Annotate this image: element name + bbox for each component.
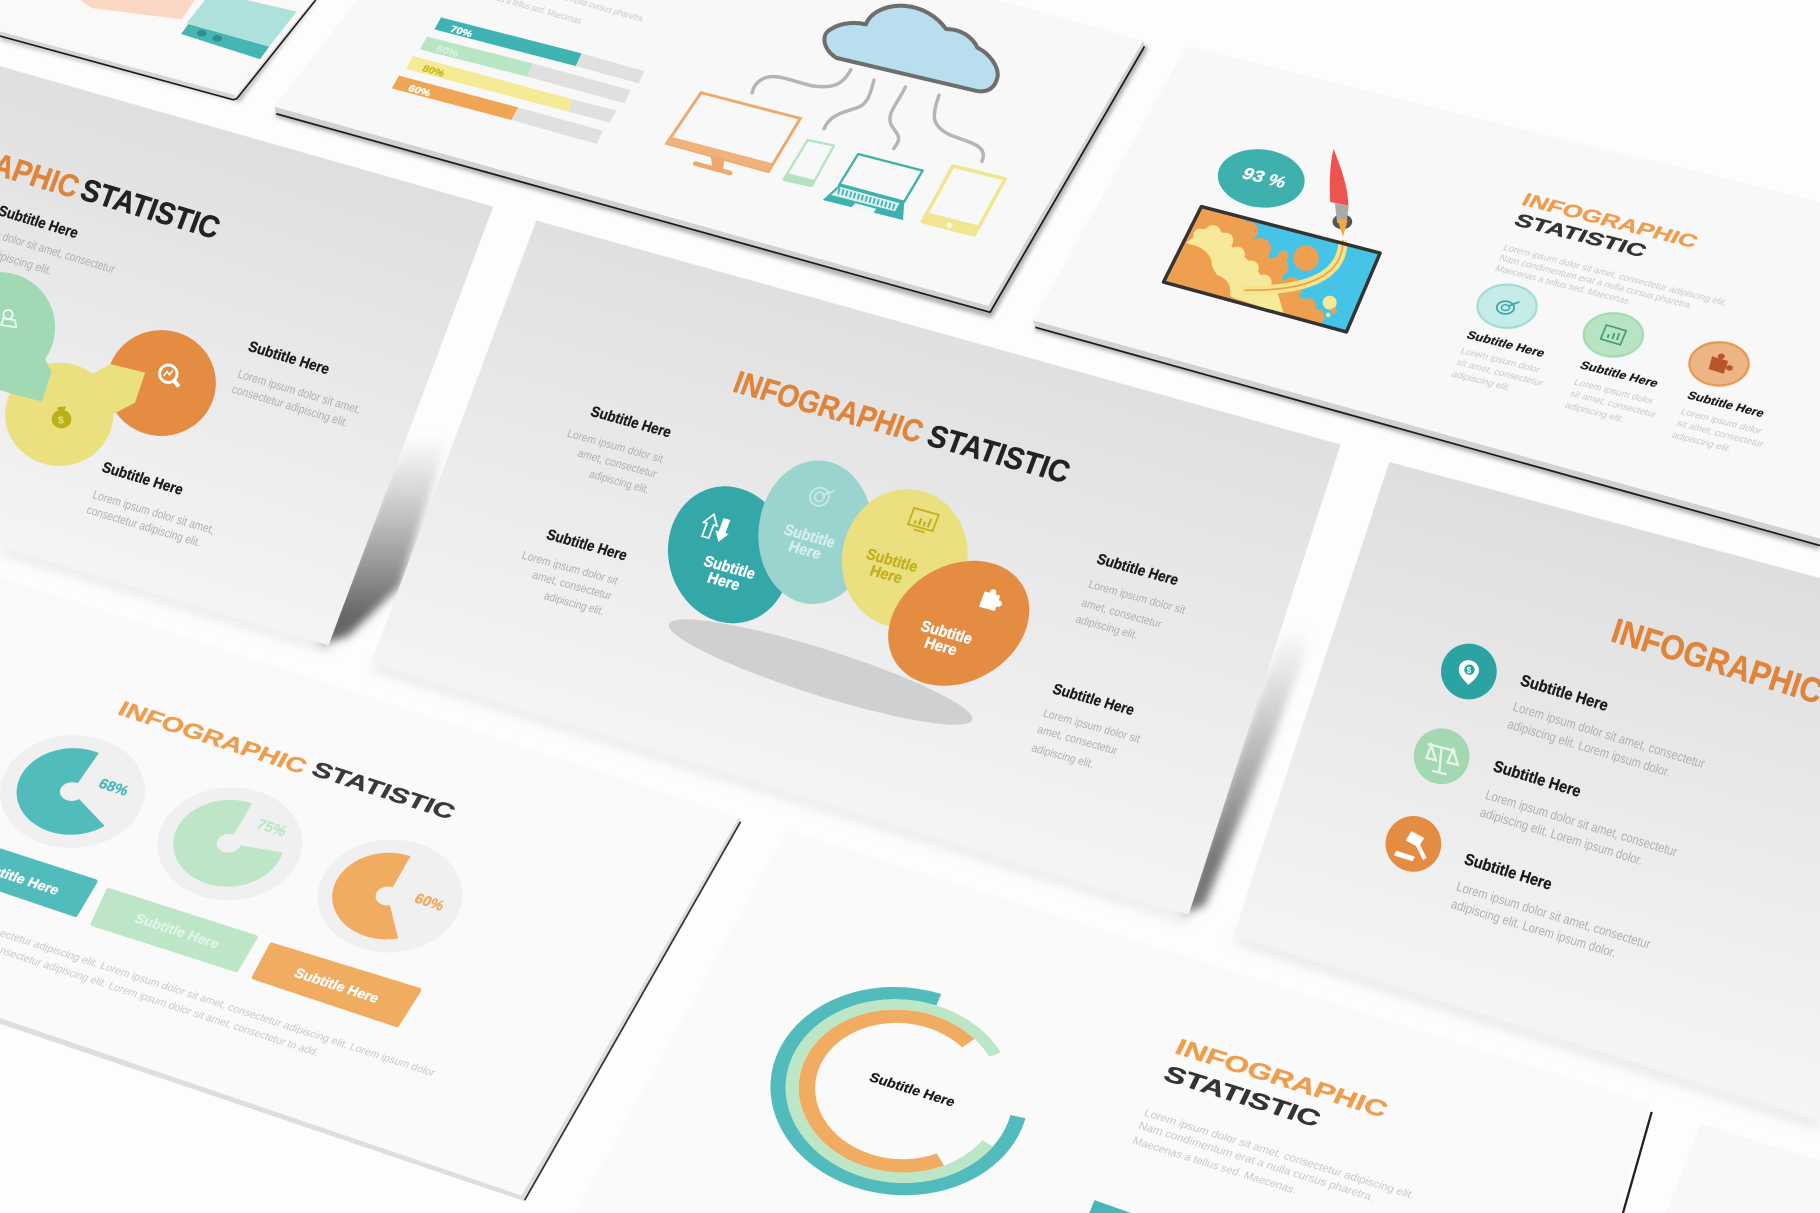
text block: right item: Lorem ipsum dolor sit amet,: [236, 367, 363, 416]
diagram: orange circle: [107, 330, 216, 436]
text block: lower right: [1030, 681, 1143, 771]
egg: orange: Here: [922, 635, 959, 659]
panel: rocket slide: [1032, 148, 1820, 552]
shadow: left slide wedge: [319, 250, 482, 645]
text block: lower right: adipiscing elit.: [1030, 742, 1096, 771]
item: gavel: Lorem ipsum dolor sit amet, consectetur: [1455, 879, 1653, 952]
text block: upper right: Subtitle Here: [1094, 551, 1181, 589]
icon: cloud: [824, 6, 998, 91]
shape: cropped teal button: [1089, 1200, 1134, 1213]
egg: teal: [653, 472, 805, 637]
shape: peach block: [80, 0, 195, 19]
icon: tablet: [922, 166, 1005, 235]
pie chart: 60 percent: [295, 822, 485, 970]
item: scales: [1414, 728, 1680, 868]
egg: light teal: Here: [786, 538, 824, 563]
item: chart: Subtitle Here: [1578, 359, 1661, 390]
text block: right item: [230, 338, 363, 430]
icon: laptop: [823, 154, 923, 220]
panel: centre egg diagram slide: [371, 221, 1341, 919]
icon: rocket: [1330, 149, 1352, 237]
egg: orange: [865, 536, 1052, 711]
icon: money bag: [52, 406, 71, 428]
pie chart: 60 percent: 60%: [411, 891, 447, 914]
pie chart: 68 percent: 68%: [96, 776, 131, 799]
diagram: green circle with connector: [0, 272, 55, 402]
floor shadow: [662, 602, 979, 742]
item: puzzle: [1670, 342, 1767, 454]
text block: upper right: [1074, 551, 1188, 642]
title: INFOGRAPHIC: [1518, 189, 1702, 252]
text block: upper left: amet, consectetur: [576, 447, 659, 481]
pie chart: 75 percent: [134, 770, 325, 918]
item: scales: Subtitle Here: [1491, 757, 1583, 801]
egg: yellow: Subtitle: [864, 546, 920, 576]
item: chart: sit amet, consectetur: [1568, 389, 1659, 420]
egg: teal: Here: [705, 570, 742, 594]
title second word: STATISTIC: [307, 757, 460, 825]
text block: description: Nam condimentum erat a nulla cursus pharetra.: [1497, 253, 1695, 311]
pie chart: 68 percent: [0, 718, 168, 865]
text block: description: Lorem ipsum dolor sit amet, consectetur adipiscing elit.: [1501, 243, 1729, 308]
icon: people: [1, 310, 16, 327]
panel: connected circles slide: [0, 66, 493, 649]
item: target: [1449, 285, 1548, 393]
text block: lower left: Subtitle Here: [544, 526, 630, 564]
text block: upper left: Lorem ipsum dolor sit: [565, 427, 666, 466]
item: target: Subtitle Here: [1464, 329, 1548, 359]
item: location pin: Subtitle Here: [1518, 672, 1610, 715]
chart: concentric rings: [743, 963, 1056, 1213]
text block: description: Lorem ipsum dolor sit amet, consectetur adipiscing elit.: [1142, 1106, 1417, 1201]
item: gavel: [1386, 816, 1653, 960]
button: green: [93, 890, 255, 970]
item: chart: Lorem ipsum dolor: [1572, 377, 1656, 406]
item: target: adipiscing elit.: [1449, 369, 1513, 393]
title: INFOGRAPHIC: [1171, 1035, 1392, 1123]
title: INFOGRAPHIC: [729, 364, 928, 449]
text block: upper right: amet, consectetur: [1080, 597, 1164, 631]
item: target: Lorem ipsum dolor: [1458, 346, 1543, 375]
text block: lower right: Lorem ipsum dolor sit: [1041, 707, 1143, 746]
connector wires: [752, 70, 983, 161]
illustration: tablet with rocket launch: [1156, 207, 1380, 332]
bar chart: percentage bars: 60%: [434, 44, 460, 59]
shadow: centre slide wedge: [1182, 499, 1329, 915]
title second word: STATISTIC: [923, 418, 1075, 490]
text block: lower item: consectetur adipiscing elit.: [85, 503, 203, 550]
panel: cloud devices slide: [275, 0, 1146, 315]
item: chart: [1563, 313, 1661, 424]
panel: pie charts slide: [0, 577, 741, 1201]
item: scales: adipiscing elit. Lorem ipsum dolor.: [1478, 805, 1645, 868]
egg: orange: Subtitle: [918, 618, 975, 648]
title: INFOGRAPHIC: [114, 697, 311, 779]
item: gavel: adipiscing elit. Lorem ipsum dolor.: [1449, 896, 1618, 960]
text block: description: Maecenas a tellus sed. Maecenas.: [1493, 264, 1633, 307]
shape: device base with dots: [181, 24, 269, 59]
item: puzzle: Subtitle Here: [1685, 389, 1767, 420]
panel: top-left partial slide: [0, 0, 316, 102]
title second word: STATISTIC: [76, 172, 225, 246]
bar chart: percentage bars: 60%: [406, 84, 432, 99]
text block: top-left item: [0, 203, 117, 278]
item: location pin: adipiscing elit. Lorem ipsum dolor.: [1506, 716, 1673, 780]
text block: upper left: adipiscing elit.: [587, 468, 651, 496]
item: target: sit amet, consectetur: [1454, 358, 1545, 388]
egg: yellow: [828, 476, 982, 640]
button: orange: Subtitle Here: [291, 966, 382, 1006]
text block: description: Nam condimentum erat a nulla cursus pharetra.: [1136, 1119, 1377, 1203]
text block: right item: consectetur adipiscing elit.: [230, 382, 350, 430]
item: puzzle: Lorem ipsum dolor: [1679, 407, 1764, 436]
icon: desktop monitor: [667, 93, 800, 173]
text block: lower item: Subtitle Here: [100, 459, 186, 499]
text block: lower right: Subtitle Here: [1050, 681, 1137, 719]
icon: smartphone: [783, 140, 834, 186]
item: location pin: [1441, 644, 1707, 780]
button: orange: [254, 945, 419, 1025]
text block: lower left: Lorem ipsum dolor sit: [520, 549, 620, 588]
panel: right list slide: [1234, 462, 1820, 1125]
text block: upper left: Subtitle Here: [588, 403, 674, 441]
text block: description: [1493, 243, 1729, 311]
panel: bottom-right partial slide: [1666, 1124, 1820, 1213]
text block: lower left: amet, consectetur: [531, 569, 614, 603]
text block: lower item: [85, 459, 217, 550]
bar chart: percentage bars: 80%: [420, 64, 446, 79]
item: location pin: Lorem ipsum dolor sit amet, consectetur: [1511, 699, 1707, 771]
bar chart: percentage bars: 70%: [448, 24, 474, 40]
text block: lower left: adipiscing elit.: [542, 590, 606, 618]
egg: light teal: [751, 455, 879, 610]
text block: lower left: [520, 526, 630, 618]
title line two: STATISTIC: [1511, 209, 1651, 261]
item: scales: Lorem ipsum dolor sit amet, consectetur: [1484, 787, 1680, 859]
button: green: Subtitle Here: [132, 911, 222, 952]
shape: device screen: [187, 0, 297, 46]
text block: description: Maecenas a tellus sed. Maecenas.: [1131, 1134, 1299, 1196]
bar chart: percentage bars: [392, 17, 644, 144]
text block: upper left: [565, 403, 674, 496]
chart label: Subtitle Here: [867, 1070, 958, 1110]
text block: lower right: amet, consectetur: [1035, 723, 1120, 757]
icon: magnifier: [160, 365, 179, 387]
text block: description: nsectetur adipiscing elit. Lorem ipsum dolor sit amet, consectetur to add.: [0, 944, 322, 1059]
title line two: STATISTIC: [1160, 1062, 1325, 1132]
text block: upper right: Lorem ipsum dolor sit: [1087, 578, 1188, 617]
text block: upper right: adipiscing elit.: [1074, 613, 1140, 642]
item: puzzle: adipiscing elit.: [1670, 430, 1733, 454]
pie chart: 75 percent: 75%: [254, 816, 289, 840]
panel: ring chart slide: [575, 830, 1652, 1213]
egg: teal: Subtitle: [701, 553, 758, 583]
text block: description: ectetur adipiscing elit. Lorem ipsum dolor sit amet, consectetur adipiscing elit. Lorem ipsum dolor: [0, 927, 438, 1079]
egg: yellow: Here: [867, 563, 905, 587]
text block: cropped description: [469, 0, 681, 27]
icon: money bag: $: [58, 416, 64, 427]
text block: right item: Subtitle Here: [246, 338, 332, 378]
item: location pin: $: [1467, 666, 1472, 675]
item: chart: adipiscing elit.: [1563, 401, 1626, 424]
badge: 93 percent: [1215, 145, 1308, 212]
egg: light teal: Subtitle: [781, 522, 838, 552]
item: puzzle: sit amet, consectetur: [1675, 419, 1766, 449]
item: gavel: Subtitle Here: [1462, 850, 1554, 894]
badge: 93 percent: 93 %: [1239, 165, 1290, 192]
diagram: yellow circle with connector: [5, 363, 145, 466]
text block: lower item: Lorem ipsum dolor sit amet,: [91, 488, 217, 537]
button: teal: [0, 848, 95, 915]
